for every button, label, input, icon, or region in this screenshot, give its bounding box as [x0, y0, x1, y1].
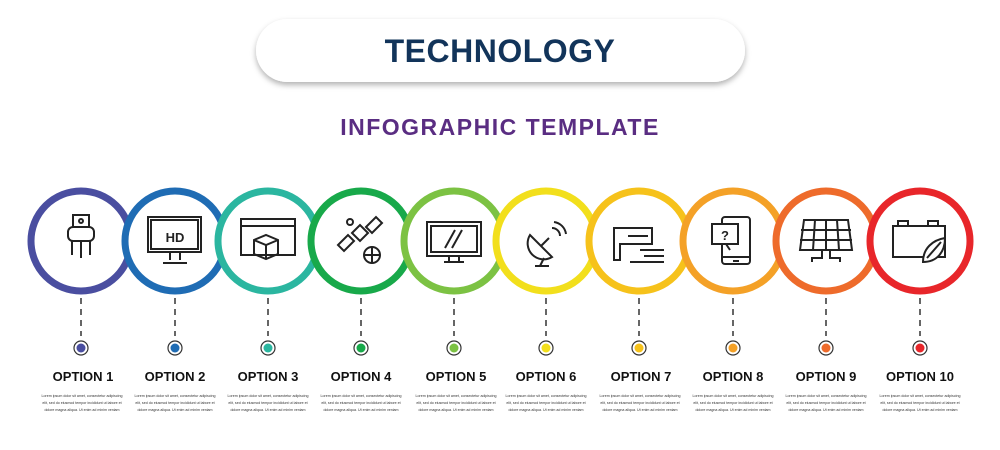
- icon: monitor: [427, 222, 481, 262]
- description texts: dolore magna aliqua. Ut enim ad minim veniam: [788, 408, 864, 412]
- circle 10: [870, 191, 970, 291]
- icon: card reader: [614, 228, 664, 262]
- circle 8: [683, 191, 783, 291]
- circle 2: [125, 191, 225, 291]
- option labels: OPTION 1: [53, 369, 113, 384]
- icon: solar panel: [800, 220, 852, 262]
- description texts: Lorem ipsum dolor sit amet, consectetur adipiscing: [416, 394, 496, 398]
- description texts: elit, sed do eiusmod tempor incididunt ut labore et: [693, 401, 773, 405]
- subtitle: INFOGRAPHIC TEMPLATE: [340, 114, 660, 140]
- option markers: [81, 298, 920, 336]
- description texts: Lorem ipsum dolor sit amet, consectetur adipiscing: [880, 394, 960, 398]
- description texts: Lorem ipsum dolor sit amet, consectetur adipiscing: [42, 394, 122, 398]
- description texts: Lorem ipsum dolor sit amet, consectetur adipiscing: [786, 394, 866, 398]
- description texts: Lorem ipsum dolor sit amet, consectetur adipiscing: [135, 394, 215, 398]
- option labels: OPTION 8: [703, 369, 763, 384]
- option labels: OPTION 3: [238, 369, 298, 384]
- icon: transistor: [68, 215, 94, 258]
- option labels: OPTION 6: [516, 369, 576, 384]
- icon: satellite: [338, 217, 382, 263]
- option labels: OPTION 5: [426, 369, 486, 384]
- icon: eco battery: [893, 221, 945, 262]
- description texts: elit, sed do eiusmod tempor incididunt ut labore et: [321, 401, 401, 405]
- description texts: elit, sed do eiusmod tempor incididunt ut labore et: [600, 401, 680, 405]
- circle 3: [218, 191, 318, 291]
- title: TECHNOLOGY: [385, 33, 615, 69]
- option labels: OPTION 2: [145, 369, 205, 384]
- option labels: [53, 369, 954, 384]
- icon: HD monitor: HD: [166, 230, 184, 245]
- description texts: dolore magna aliqua. Ut enim ad minim veniam: [230, 408, 306, 412]
- description texts: dolore magna aliqua. Ut enim ad minim veniam: [44, 408, 120, 412]
- option labels: OPTION 10: [886, 369, 954, 384]
- description texts: elit, sed do eiusmod tempor incididunt ut labore et: [42, 401, 122, 405]
- description texts: Lorem ipsum dolor sit amet, consectetur adipiscing: [506, 394, 586, 398]
- circle 7: [589, 191, 689, 291]
- description texts: elit, sed do eiusmod tempor incididunt ut labore et: [786, 401, 866, 405]
- icon: phone question: ?: [721, 228, 729, 243]
- description texts: dolore magna aliqua. Ut enim ad minim veniam: [508, 408, 584, 412]
- icon: satellite dish: [528, 222, 566, 266]
- circle 5: [404, 191, 504, 291]
- description texts: dolore magna aliqua. Ut enim ad minim veniam: [882, 408, 958, 412]
- description texts: Lorem ipsum dolor sit amet, consectetur adipiscing: [321, 394, 401, 398]
- option labels: OPTION 4: [331, 369, 392, 384]
- dots: [74, 341, 927, 355]
- description texts: elit, sed do eiusmod tempor incididunt ut labore et: [228, 401, 308, 405]
- circle 4: [311, 191, 411, 291]
- description texts: dolore magna aliqua. Ut enim ad minim veniam: [323, 408, 399, 412]
- option labels: OPTION 9: [796, 369, 856, 384]
- option labels: OPTION 7: [611, 369, 671, 384]
- description texts: dolore magna aliqua. Ut enim ad minim veniam: [695, 408, 771, 412]
- description texts: [42, 394, 960, 412]
- description texts: elit, sed do eiusmod tempor incididunt ut labore et: [880, 401, 960, 405]
- description texts: Lorem ipsum dolor sit amet, consectetur adipiscing: [228, 394, 308, 398]
- circle 6: [496, 191, 596, 291]
- description texts: elit, sed do eiusmod tempor incididunt ut labore et: [416, 401, 496, 405]
- circle 1: [31, 191, 131, 291]
- circle 9: [776, 191, 876, 291]
- description texts: dolore magna aliqua. Ut enim ad minim veniam: [602, 408, 678, 412]
- description texts: elit, sed do eiusmod tempor incididunt ut labore et: [135, 401, 215, 405]
- description texts: elit, sed do eiusmod tempor incididunt ut labore et: [506, 401, 586, 405]
- icon: browser box: [241, 219, 295, 259]
- description texts: Lorem ipsum dolor sit amet, consectetur adipiscing: [600, 394, 680, 398]
- title pill: [256, 19, 745, 82]
- description texts: Lorem ipsum dolor sit amet, consectetur adipiscing: [693, 394, 773, 398]
- description texts: dolore magna aliqua. Ut enim ad minim veniam: [137, 408, 213, 412]
- description texts: dolore magna aliqua. Ut enim ad minim veniam: [418, 408, 494, 412]
